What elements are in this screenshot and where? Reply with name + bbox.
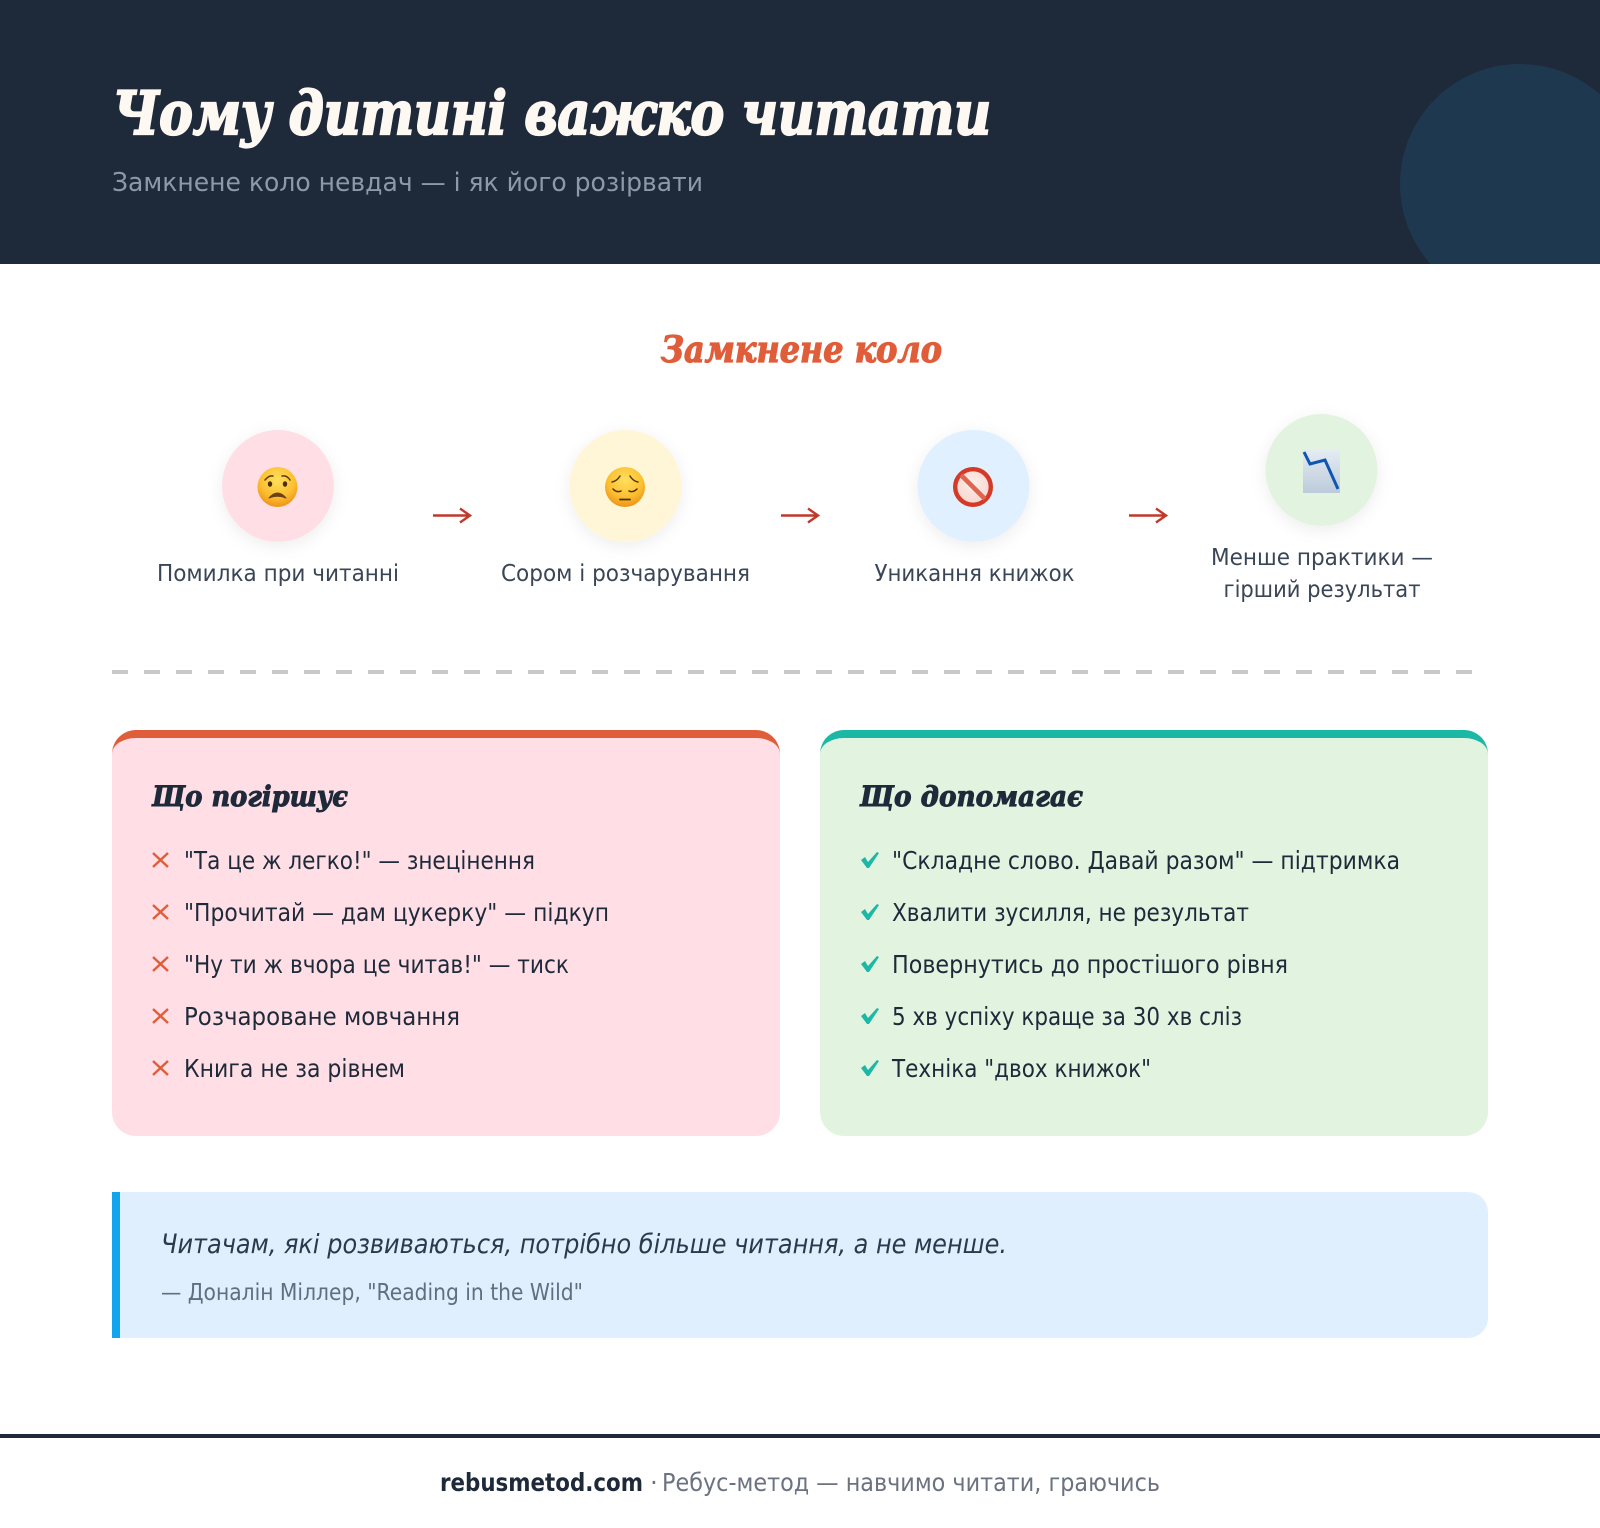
list: helpful actions: 5 хв успіху краще за 30 хв сліз <box>892 1002 1242 1031</box>
step 2 <box>501 430 750 587</box>
list: harmful phrases <box>153 846 609 1083</box>
label: shame and disappointment: Сором і розчарування <box>501 561 750 587</box>
arrow 2 <box>781 508 818 522</box>
subtitle: Замкнене коло невдач — і як його розірвати <box>112 168 703 198</box>
header decorative circle <box>1400 64 1600 264</box>
label: less practice, worse result: Менше практики — <box>1211 545 1433 571</box>
heading: what makes it worse: Що погіршує <box>151 780 348 813</box>
footer brand: rebusmetod.com <box>440 1468 643 1497</box>
arrow 1 <box>433 508 470 522</box>
step 4 <box>1211 414 1433 603</box>
step 3 <box>874 430 1075 587</box>
icon: declining chart <box>1266 414 1378 526</box>
list: helpful actions: Хвалити зусилля, не результат <box>892 898 1249 927</box>
panel: what makes it worse <box>112 730 780 1136</box>
label: less practice, worse result <box>1211 545 1433 603</box>
panel: what helps <box>820 730 1488 1136</box>
step 1 <box>157 430 399 587</box>
icon: pensive face <box>570 430 682 542</box>
list: harmful phrases: Книга не за рівнем <box>184 1054 405 1083</box>
list: harmful phrases: "Прочитай — дам цукерку" — підкуп <box>184 898 609 927</box>
heading: what helps: Що допомагає <box>859 780 1083 813</box>
quote text: Читачам, які розвиваються, потрібно більше читання, а не менше. <box>161 1229 1007 1260</box>
label: avoiding books: Уникання книжок <box>874 561 1075 587</box>
list: helpful actions <box>861 846 1400 1083</box>
list: helpful actions: "Складне слово. Давай разом" — підтримка <box>892 846 1400 875</box>
icon: worried face <box>222 430 334 542</box>
arrow 3 <box>1129 508 1166 522</box>
label: less practice, worse result: гірший результат <box>1224 577 1420 603</box>
list: harmful phrases: "Та це ж легко!" — знецінення <box>184 846 535 875</box>
title: Чому дитині важко читати <box>113 79 991 149</box>
footer tagline: · <box>650 1468 658 1497</box>
header <box>0 0 1600 264</box>
quote attribution: — Доналін Міллер, "Reading in the Wild" <box>161 1280 583 1306</box>
list: harmful phrases: "Ну ти ж вчора це читав!" — тиск <box>184 950 569 979</box>
label: reading mistake: Помилка при читанні <box>157 561 399 587</box>
callout: quote <box>112 1192 1488 1338</box>
list: helpful actions: Техніка "двох книжок" <box>891 1054 1151 1083</box>
list: helpful actions: Повернутись до простішого рівня <box>892 950 1288 979</box>
flow diagram: vicious circle <box>157 414 1433 603</box>
footer <box>0 1434 1600 1497</box>
icon: prohibited sign <box>918 430 1030 542</box>
section heading: vicious circle: Замкнене коло <box>661 329 942 371</box>
list: harmful phrases: Розчароване мовчання <box>184 1002 460 1031</box>
footer tagline: Ребус-метод — навчимо читати, граючись <box>662 1468 1160 1497</box>
